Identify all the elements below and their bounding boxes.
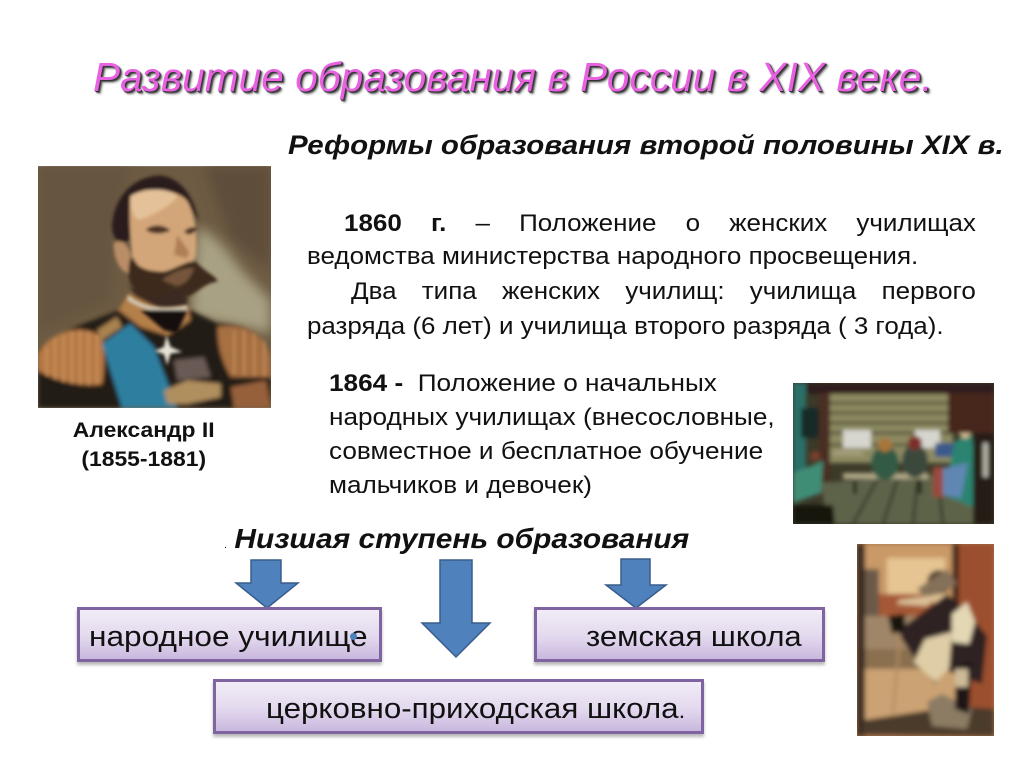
marker dot [350, 633, 357, 640]
ear [114, 241, 131, 273]
heading: lower level of education: . Низшая ступень образования [224, 523, 689, 554]
nose shadow [174, 235, 189, 258]
text block: 1864 reform: 1864 - Положение о начальных [329, 370, 717, 397]
medals [164, 380, 221, 404]
arrow: to церковно-приходская школа [422, 560, 490, 657]
box: земская школа: земская школа [586, 621, 802, 653]
epaulette left [38, 330, 104, 385]
hair [112, 176, 198, 243]
text block: 1864 reform [329, 370, 775, 499]
portrait: Alexander II [38, 166, 271, 408]
painting: boy with bag [857, 544, 994, 736]
epaulette fringe [47, 330, 264, 385]
portrait caption [73, 419, 215, 471]
portrait caption: Александр II [73, 419, 215, 442]
neck [130, 287, 187, 310]
text block: 1860 reform: разряда (6 лет) и училища второго разряда ( 3 года). [307, 313, 944, 340]
order cross [154, 335, 182, 365]
box: народное училище [77, 607, 382, 662]
box: земская школа [534, 607, 825, 662]
arrow: to земская школа [606, 559, 666, 608]
text block: 1860 reform: 1860 г. – Положение о женских училищах [344, 210, 976, 237]
text block: 1860 reform: ведомства министерства народного просвещения. [307, 243, 918, 270]
box: народное училище: народное училище [89, 621, 368, 653]
face [130, 190, 196, 273]
text block: 1860 reform [307, 210, 976, 340]
shirt collar [127, 295, 187, 312]
text block: 1864 reform: народных училищах (внесословные, [329, 404, 775, 431]
beard [129, 257, 217, 297]
arrow: to народное училище [236, 560, 298, 608]
blue sash [102, 323, 177, 408]
box: церковно-приходская школа: церковно-приходская школа. [266, 693, 685, 725]
title: Развитие образования в России в XIX веке. [93, 54, 933, 100]
painting: village classroom [793, 383, 994, 524]
portrait caption: (1855-1881) [81, 448, 206, 471]
box: церковно-приходская школа [213, 679, 704, 734]
text block: 1860 reform: Два типа женских училищ: училища первого [351, 278, 976, 305]
text block: 1864 reform: совместное и бесплатное обучение [329, 438, 763, 465]
collar [119, 293, 191, 335]
text block: 1864 reform: мальчиков и девочек) [329, 472, 592, 499]
epaulette right [217, 326, 271, 377]
eyes [145, 225, 171, 234]
subtitle: Реформы образования второй половины XIX в. [288, 130, 1004, 160]
coat [38, 307, 271, 408]
